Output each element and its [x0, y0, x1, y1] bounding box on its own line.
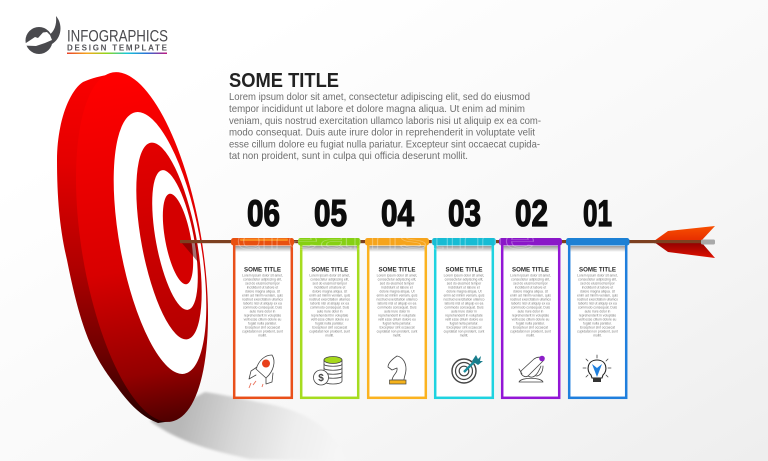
watermark: dreamstime: [236, 223, 536, 256]
card text: Lorem ipsum dolor sit amet,: [510, 274, 551, 278]
icon: coins: [314, 356, 342, 385]
card text: commodo consequat. Duis: [310, 306, 350, 310]
icon: coins: $: [318, 373, 324, 384]
card text: enim ad minim veniam, quis: [309, 294, 350, 298]
card title: SOME TITLE: [311, 266, 349, 274]
card text: incididunt ut labore et: [582, 286, 613, 290]
step numbers: 01: [583, 193, 612, 234]
intro paragraph: Lorem ipsum dolor sit amet, consectetur adipiscing elit, sed do eiusmod: [229, 91, 530, 103]
card text: sed do eiusmod tempor: [380, 282, 415, 286]
card text: nostrud exercitation ullamco: [242, 298, 283, 302]
card text: Lorem ipsum dolor sit amet,: [577, 274, 618, 278]
card text: fugiat nulla pariatur.: [516, 322, 545, 326]
card text: fugiat nulla pariatur.: [248, 322, 277, 326]
card text: cupidatat non proident, sunt: [577, 330, 618, 334]
card text: incididunt ut labore et: [381, 286, 413, 290]
card 01: light bulb: [566, 238, 630, 398]
card 05: coins: [298, 238, 360, 398]
card text: dolore magna aliqua. Ut: [379, 290, 415, 294]
card text: Lorem ipsum dolor sit amet,: [309, 274, 350, 278]
card text: mollit.: [258, 334, 267, 338]
intro paragraph: [229, 91, 541, 162]
card text: consectetur adipiscing elit,: [378, 278, 416, 282]
card text: cupidatat non proident, sunt: [242, 330, 283, 334]
card bar: [499, 238, 562, 246]
card text: commodo consequat. Duis: [578, 306, 617, 310]
card text: velit esse cillum dolore eu: [512, 318, 550, 322]
target board: [54, 63, 230, 431]
card text: mollit.: [325, 334, 334, 338]
card text: sed do eiusmod tempor: [245, 282, 281, 286]
card text: velit esse cillum dolore eu: [445, 318, 483, 322]
card text: aute irure dolor in: [451, 310, 477, 314]
card text: Excepteur sint occaecat: [245, 326, 280, 330]
step numbers: 06: [247, 193, 280, 234]
card text: cupidatat non proident, sunt: [510, 330, 551, 334]
card text: velit esse cillum dolore eu: [244, 318, 282, 322]
arrow: [180, 226, 715, 262]
card text: Lorem ipsum dolor sit amet,: [242, 274, 283, 278]
card text: sed do eiusmod tempor: [580, 282, 616, 286]
card text: aute irure dolor in: [585, 310, 610, 314]
card frame: [502, 243, 559, 398]
step numbers: 04: [381, 193, 414, 234]
card text: dolore magna aliqua. Ut: [513, 290, 548, 294]
card text: commodo consequat. Duis: [511, 306, 550, 310]
card text: incididunt ut labore et: [448, 286, 480, 290]
arrow top fin: [654, 226, 715, 241]
card text: incididunt ut labore et: [515, 286, 546, 290]
card text: velit esse cillum dolore eu: [579, 318, 617, 322]
card bar: [566, 238, 630, 246]
card text: reprehenderit in voluptate: [378, 314, 416, 318]
card text: consectetur adipiscing elit,: [578, 278, 617, 282]
card bar: [231, 238, 294, 246]
card 03: target: [432, 238, 496, 398]
card 04: chess knight: [365, 238, 429, 398]
card title: SOME TITLE: [446, 266, 483, 274]
card text: mollit.: [593, 334, 602, 338]
card text: aute irure dolor in: [384, 310, 410, 314]
card text: Excepteur sint occaecat: [446, 326, 482, 330]
intro paragraph: esse cillum dolore eu fugiat nulla pariatur. Excepteur sint occaecat cupida-: [229, 138, 540, 150]
card text: sed do eiusmod tempor: [513, 282, 549, 286]
card 06: rocket: [231, 238, 294, 398]
card text: reprehenderit in voluptate: [244, 314, 281, 318]
card text: commodo consequat. Duis: [377, 306, 417, 310]
card text: commodo consequat. Duis: [444, 306, 484, 310]
icon: microscope: [519, 356, 545, 382]
arrow tip shadow: [181, 242, 198, 262]
card text: reprehenderit in voluptate: [512, 314, 549, 318]
arrow nock: [701, 240, 715, 244]
logo title: INFOGRAPHICS: [67, 26, 168, 46]
card text: fugiat nulla pariatur.: [450, 322, 479, 326]
card text: reprehenderit in voluptate: [311, 314, 349, 318]
card text: enim ad minim veniam, quis: [242, 294, 283, 298]
step numbers: 03: [448, 193, 481, 234]
card frame: [569, 243, 626, 398]
intro paragraph: veniam, quis nostrud exercitation ullamco laboris nisi ut aliquip ex ea com-: [229, 115, 541, 127]
arrow bottom fin: [654, 242, 715, 258]
card text: enim ad minim veniam, quis: [377, 294, 418, 298]
card frame: [234, 243, 292, 398]
card text: fugiat nulla pariatur.: [583, 322, 612, 326]
card text: nostrud exercitation ullamco: [376, 298, 418, 302]
card text: cupidatat non proident, sunt: [309, 330, 350, 334]
card text: Excepteur sint occaecat: [379, 326, 415, 330]
bullseye: [157, 191, 199, 287]
outer white ring: [96, 105, 224, 381]
card text: fugiat nulla pariatur.: [383, 322, 412, 326]
card text: cupidatat non proident, sunt: [444, 330, 484, 334]
intro paragraph: tat non proident, sunt in culpa qui officia deserunt mollit.: [229, 150, 468, 162]
card text: dolore magna aliqua. Ut: [312, 290, 347, 294]
logo subtitle: DESIGN TEMPLATE: [67, 44, 168, 52]
card text: mollit.: [460, 334, 468, 338]
card text: dolore magna aliqua. Ut: [446, 290, 482, 294]
card text: laboris nisi ut aliquip ex ea: [378, 302, 416, 306]
card text: consectetur adipiscing elit,: [511, 278, 550, 282]
card text: enim ad minim veniam, quis: [444, 294, 485, 298]
card text: mollit.: [393, 334, 401, 338]
main title: SOME TITLE: [229, 70, 339, 92]
target shadow: [150, 392, 346, 461]
card text: aute irure dolor in: [317, 310, 343, 314]
card text: sed do eiusmod tempor: [312, 282, 348, 286]
card text: incididunt ut labore et: [247, 286, 278, 290]
card bar: [298, 238, 360, 246]
card text: reprehenderit in voluptate: [579, 314, 616, 318]
red ring: [124, 138, 214, 344]
card text: laboris nisi ut aliquip ex ea: [243, 302, 282, 306]
card title: SOME TITLE: [244, 266, 282, 274]
card text: nostrud exercitation ullamco: [577, 298, 618, 302]
card text: laboris nisi ut aliquip ex ea: [511, 302, 550, 306]
logo icon: [22, 16, 61, 54]
logo: [22, 16, 168, 54]
step numbers: [247, 193, 612, 234]
card text: enim ad minim veniam, quis: [510, 294, 551, 298]
card text: consectetur adipiscing elit,: [445, 278, 483, 282]
card text: nostrud exercitation ullamco: [510, 298, 551, 302]
card frame: [368, 243, 426, 398]
card text: nostrud exercitation ullamco: [309, 298, 350, 302]
card text: velit esse cillum dolore eu: [311, 318, 349, 322]
rainbow rule: [67, 52, 167, 54]
card frame: [301, 243, 358, 398]
card text: enim ad minim veniam, quis: [577, 294, 618, 298]
card text: laboris nisi ut aliquip ex ea: [445, 302, 483, 306]
card text: sed do eiusmod tempor: [447, 282, 482, 286]
card text: fugiat nulla pariatur.: [315, 322, 344, 326]
step numbers: 02: [515, 193, 548, 234]
card text: aute irure dolor in: [518, 310, 543, 314]
card text: reprehenderit in voluptate: [445, 314, 483, 318]
intro paragraph: tempor incididunt ut labore et dolore magna aliqua. Ut enim ad minim: [229, 103, 525, 115]
card text: Excepteur sint occaecat: [580, 326, 615, 330]
card title: SOME TITLE: [378, 266, 416, 274]
card text: mollit.: [526, 334, 535, 338]
inner white ring: [143, 167, 207, 313]
icon: rocket: [249, 355, 274, 388]
arrow shaft over fletching: [654, 240, 702, 243]
card text: laboris nisi ut aliquip ex ea: [310, 302, 349, 306]
arrow shaft: [180, 240, 706, 243]
card text: velit esse cillum dolore eu: [378, 318, 416, 322]
card text: Excepteur sint occaecat: [513, 326, 548, 330]
board face: [54, 63, 230, 431]
card text: Excepteur sint occaecat: [312, 326, 347, 330]
card text: consectetur adipiscing elit,: [310, 278, 349, 282]
card frame: [435, 243, 493, 398]
card text: consectetur adipiscing elit,: [243, 278, 282, 282]
card bar: [432, 238, 496, 246]
card bar: [365, 238, 429, 246]
card text: Lorem ipsum dolor sit amet,: [377, 274, 417, 278]
icon: target with arrow: [452, 355, 483, 383]
card title: SOME TITLE: [512, 266, 550, 274]
card text: dolore magna aliqua. Ut: [245, 290, 280, 294]
card text: laboris nisi ut aliquip ex ea: [578, 302, 617, 306]
card 02: microscope: [499, 238, 562, 398]
step numbers: 05: [314, 193, 347, 234]
card text: commodo consequat. Duis: [243, 306, 282, 310]
board rim: [57, 74, 200, 423]
card text: Lorem ipsum dolor sit amet,: [444, 274, 484, 278]
icon: chess knight: [388, 356, 406, 384]
card text: aute irure dolor in: [250, 310, 275, 314]
card text: incididunt ut labore et: [314, 286, 345, 290]
icon: light bulb: [583, 355, 611, 382]
card text: dolore magna aliqua. Ut: [580, 290, 615, 294]
card text: nostrud exercitation ullamco: [443, 298, 485, 302]
intro paragraph: modo consequat. Duis aute irure dolor in reprehenderit in voluptate velit: [229, 126, 535, 138]
card text: cupidatat non proident, sunt: [377, 330, 417, 334]
card title: SOME TITLE: [579, 266, 617, 274]
